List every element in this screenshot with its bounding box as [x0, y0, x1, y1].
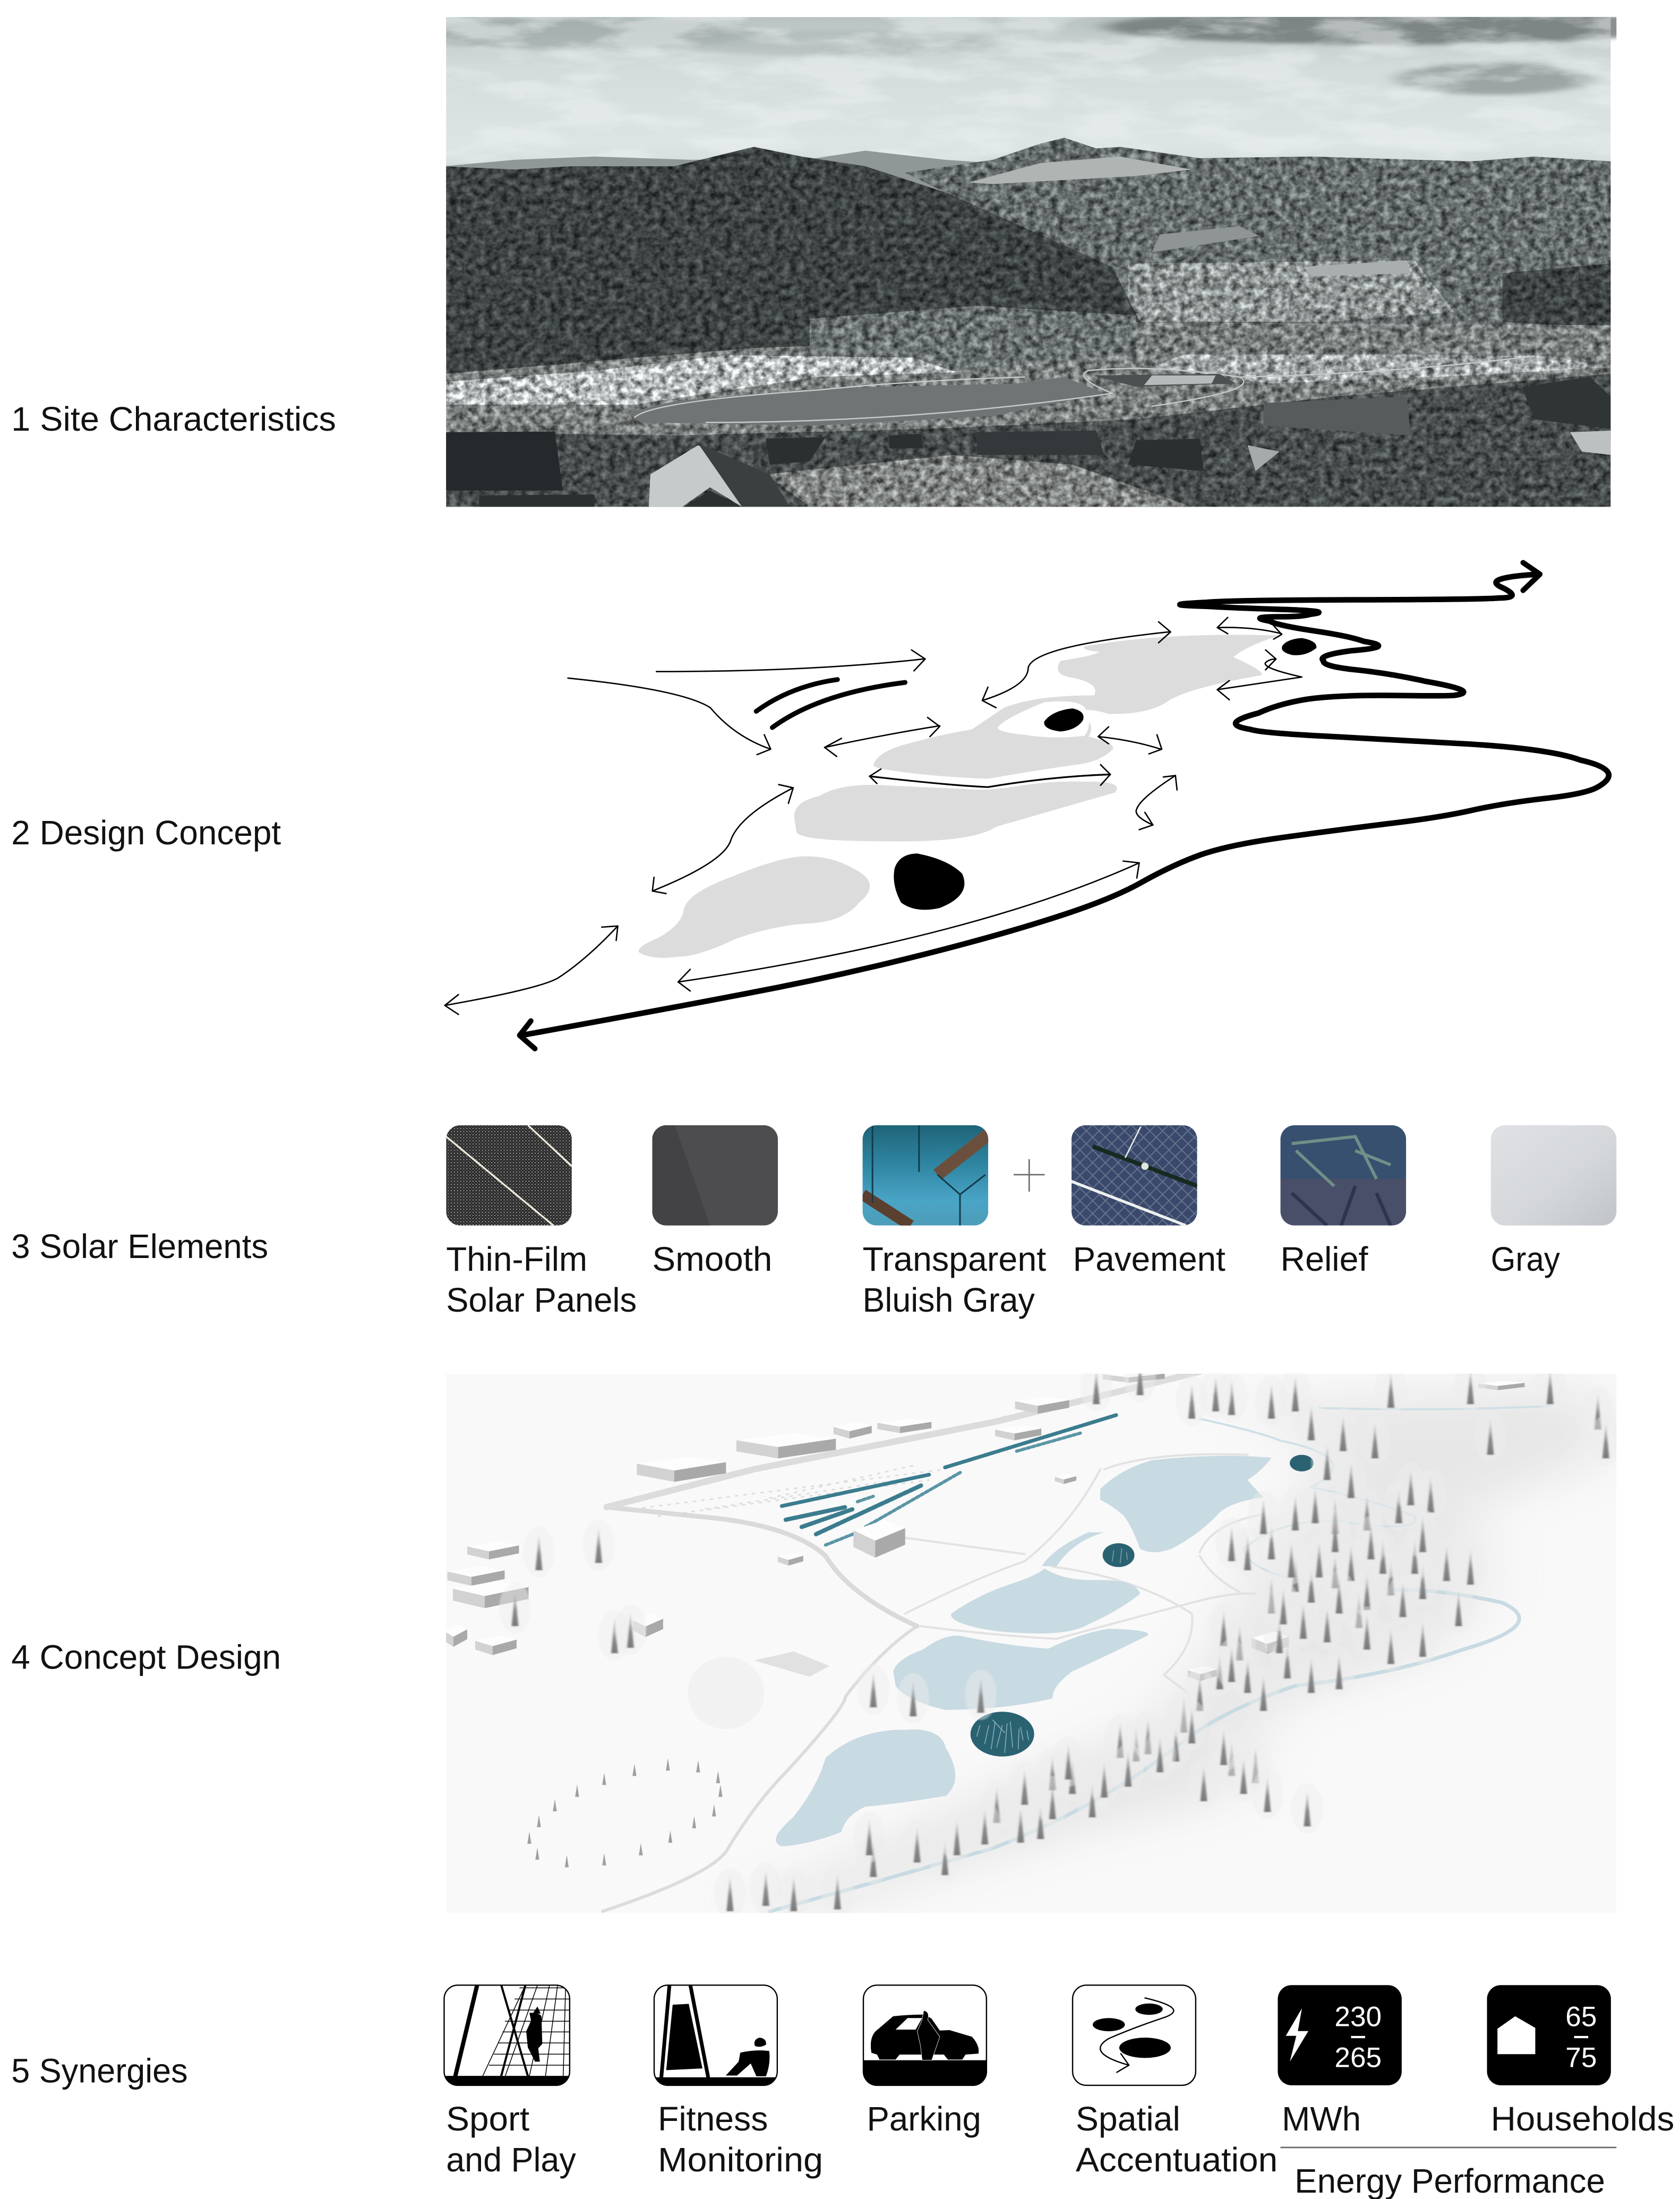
- label: Thin-Film Solar Panels: [446, 1240, 637, 1319]
- forest ground shading: [738, 1386, 1610, 1910]
- label: Transparent Bluish Gray: Transparent: [863, 1240, 1046, 1278]
- label: Thin-Film Solar Panels: Solar Panels: [446, 1281, 637, 1319]
- arrow: [870, 765, 1110, 787]
- arrow: [653, 784, 793, 894]
- swatch: transparent bluish gray: [863, 1125, 991, 1226]
- label: Sport and Play: Sport: [446, 2100, 529, 2138]
- domes: [971, 1455, 1314, 1757]
- pond 2: [893, 1629, 1148, 1710]
- icons: synergies pictograms: [444, 1985, 1611, 2085]
- water body: small: [1282, 638, 1316, 655]
- buildings: [443, 1371, 1524, 1681]
- trees: [499, 1352, 1622, 1919]
- swatch: smooth: [652, 1125, 778, 1226]
- panel: site photograph: [404, 9, 1677, 507]
- section label: 1 Site Characteristics: 1 Site Characteristics: [11, 400, 336, 438]
- icon: fitness monitoring: [654, 1985, 777, 2085]
- arrow: [1098, 727, 1162, 754]
- label: MWh: MWh: [1282, 2100, 1361, 2138]
- distant hills: [443, 151, 1610, 212]
- pond connector: [1042, 1533, 1104, 1567]
- label: Transparent Bluish Gray: Bluish Gray: [863, 1281, 1035, 1319]
- label: Fitness Monitoring: Monitoring: [658, 2141, 823, 2179]
- gray zone: middle: [794, 782, 1117, 841]
- arrow: [1218, 650, 1302, 700]
- label: Energy Performance: Energy Performance: [1295, 2162, 1605, 2199]
- section label: 3 Solar Elements: 3 Solar Elements: [11, 1227, 268, 1265]
- right wooded hills: [905, 138, 1610, 332]
- pond 1: [776, 1730, 955, 1846]
- diagram: design concept sketch: [445, 562, 1609, 1049]
- label: Thin-Film Solar Panels: Thin-Film: [446, 1240, 587, 1278]
- solar panel rows: [782, 1415, 1116, 1545]
- village and vineyard: [443, 374, 1610, 507]
- value: households range: [1565, 2001, 1597, 2073]
- pond 3: [951, 1569, 1140, 1633]
- label: Sport and Play: [446, 2100, 576, 2179]
- section label: 5 Synergies: 5 Synergies: [11, 2052, 188, 2090]
- icon: spatial accentuation: [1073, 1985, 1196, 2085]
- valley: [443, 306, 1610, 439]
- label: Relief: Relief: [1281, 1240, 1368, 1278]
- dark forested hill: [443, 147, 1140, 379]
- value: households range: 65: [1565, 2001, 1597, 2032]
- panel: concept design aerial rendering: [443, 1352, 1622, 1919]
- label: Transparent Bluish Gray: [863, 1240, 1046, 1319]
- thick strokes: two arcs: [756, 680, 905, 728]
- label: Households: Households: [1491, 2100, 1674, 2138]
- swatch: relief: [1281, 1125, 1406, 1226]
- thick stream: winding river with arrow ends: [520, 562, 1609, 1049]
- sky: [446, 17, 1616, 166]
- streams: [770, 1406, 1550, 1911]
- tree ring: [527, 1758, 723, 1867]
- icon: parking: [863, 1985, 987, 2085]
- value: MWh range: [1334, 2001, 1382, 2073]
- label: Pavement: Pavement: [1073, 1240, 1225, 1278]
- ghost circle: [688, 1657, 764, 1729]
- value: households range: 75: [1565, 2042, 1597, 2073]
- gray zone: upper: [873, 635, 1279, 779]
- label: Sport and Play: and Play: [446, 2141, 576, 2179]
- roads and paths: [603, 1372, 1264, 1911]
- label: Parking: Parking: [867, 2100, 981, 2138]
- icon: MWh tile: [1278, 1985, 1402, 2085]
- gray zone: lower: [639, 857, 870, 958]
- label: Smooth: Smooth: [652, 1240, 772, 1278]
- swatch: pavement: [1069, 1125, 1197, 1226]
- section label: 2 Design Concept: 2 Design Concept: [11, 814, 281, 852]
- value: MWh range: 230: [1334, 2001, 1382, 2032]
- sport field: [754, 1652, 829, 1677]
- pond 4: [1100, 1456, 1272, 1552]
- label: Spatial Accentuation: [1076, 2100, 1278, 2179]
- water body: middle: [1044, 708, 1084, 732]
- water body: large: [894, 853, 964, 910]
- value: MWh range: 265: [1334, 2042, 1382, 2073]
- label: Fitness Monitoring: [658, 2100, 823, 2179]
- arrow: [445, 926, 618, 1014]
- icon: sport and play: [444, 1985, 570, 2085]
- section label: 4 Concept Design: 4 Concept Design: [11, 1638, 281, 1676]
- arrow: [656, 650, 925, 672]
- arrow: [568, 678, 770, 755]
- arrow: [982, 622, 1171, 708]
- arrow: [1136, 775, 1177, 829]
- arrow: [1218, 618, 1282, 639]
- icon: plus: [1014, 1159, 1045, 1192]
- label: Gray: Gray: [1491, 1240, 1560, 1278]
- label: Spatial Accentuation: Spatial: [1076, 2100, 1180, 2138]
- swatch: gray: [1491, 1125, 1616, 1226]
- label: Spatial Accentuation: Accentuation: [1076, 2141, 1278, 2179]
- swatch: thin-film solar panels: [446, 1125, 572, 1226]
- icon: households tile: [1487, 1985, 1611, 2085]
- arrow: [678, 861, 1139, 991]
- arrow: [825, 717, 940, 756]
- label: Fitness Monitoring: Fitness: [658, 2100, 768, 2138]
- white clearing: [998, 701, 1089, 738]
- divider: energy performance: [1281, 2147, 1616, 2148]
